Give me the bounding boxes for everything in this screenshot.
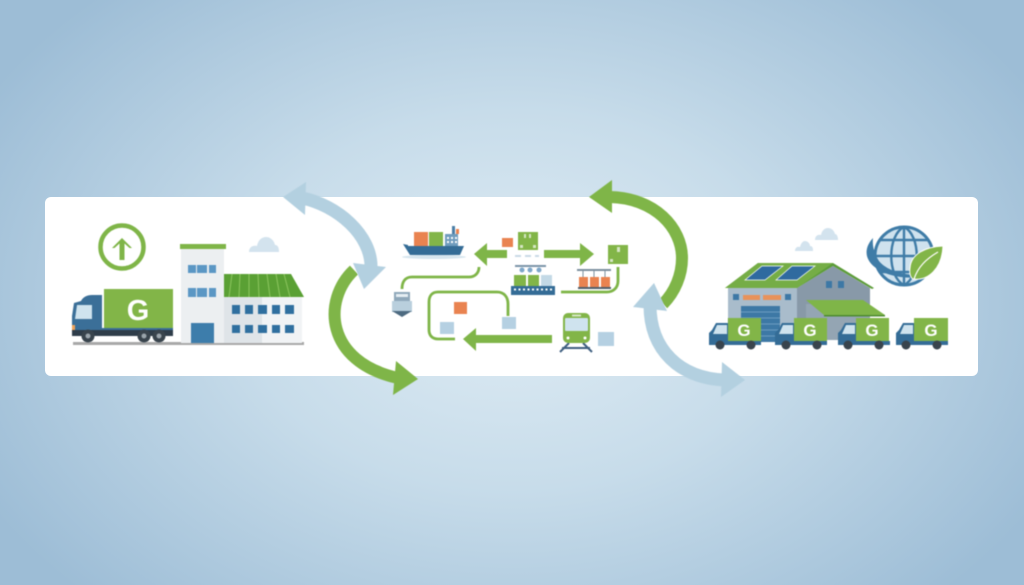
icon: orange parcel in loop	[454, 302, 467, 314]
truck: fleet 2	[775, 318, 827, 350]
cloud: left	[249, 237, 279, 252]
truck: large G truck	[72, 289, 173, 342]
arrow: right to parcel	[544, 243, 594, 266]
truck: large G truck: G	[127, 295, 149, 327]
warehouse	[725, 263, 885, 342]
icon: globe with leaf	[867, 227, 943, 285]
icon: sorting conveyor	[511, 265, 555, 295]
icon: green parcel right	[608, 245, 628, 264]
icon: green parcel	[515, 232, 539, 256]
icon: pale parcel right of loop	[502, 317, 516, 329]
icon: pale parcel by train	[598, 332, 614, 346]
arrow: pale blue lower right arc	[633, 283, 745, 397]
upward arrow badge	[100, 226, 144, 268]
icon: pale parcel in loop	[440, 322, 454, 334]
connector: return loop	[429, 292, 508, 339]
arrow: left from packing to ship	[474, 243, 507, 266]
arrow: green upper right arc	[589, 180, 682, 304]
truck: fleet 2: G	[803, 321, 817, 340]
connector: ship to small vessel	[402, 267, 479, 289]
truck: fleet 4	[896, 318, 948, 350]
icon: orange parcel conveyor	[577, 269, 611, 289]
factory building	[73, 244, 304, 345]
truck: fleet 3	[838, 318, 890, 350]
panel: white band	[45, 197, 978, 376]
icon: train	[560, 313, 592, 352]
truck: fleet 3: G	[865, 321, 879, 340]
arrow: pale blue upper left arc	[283, 182, 386, 289]
truck: fleet 4: G	[924, 321, 938, 340]
arrow: green lower left arc	[335, 270, 418, 395]
arrow: left from train	[463, 328, 552, 351]
truck: fleet 1	[709, 318, 761, 350]
connector: parcel to conveyor	[561, 267, 618, 292]
icon: orange parcel	[502, 238, 513, 247]
truck: fleet 1: G	[737, 321, 751, 340]
clouds: right	[795, 228, 838, 251]
icon: container ship	[402, 226, 466, 259]
icon: small vessel	[392, 292, 412, 317]
